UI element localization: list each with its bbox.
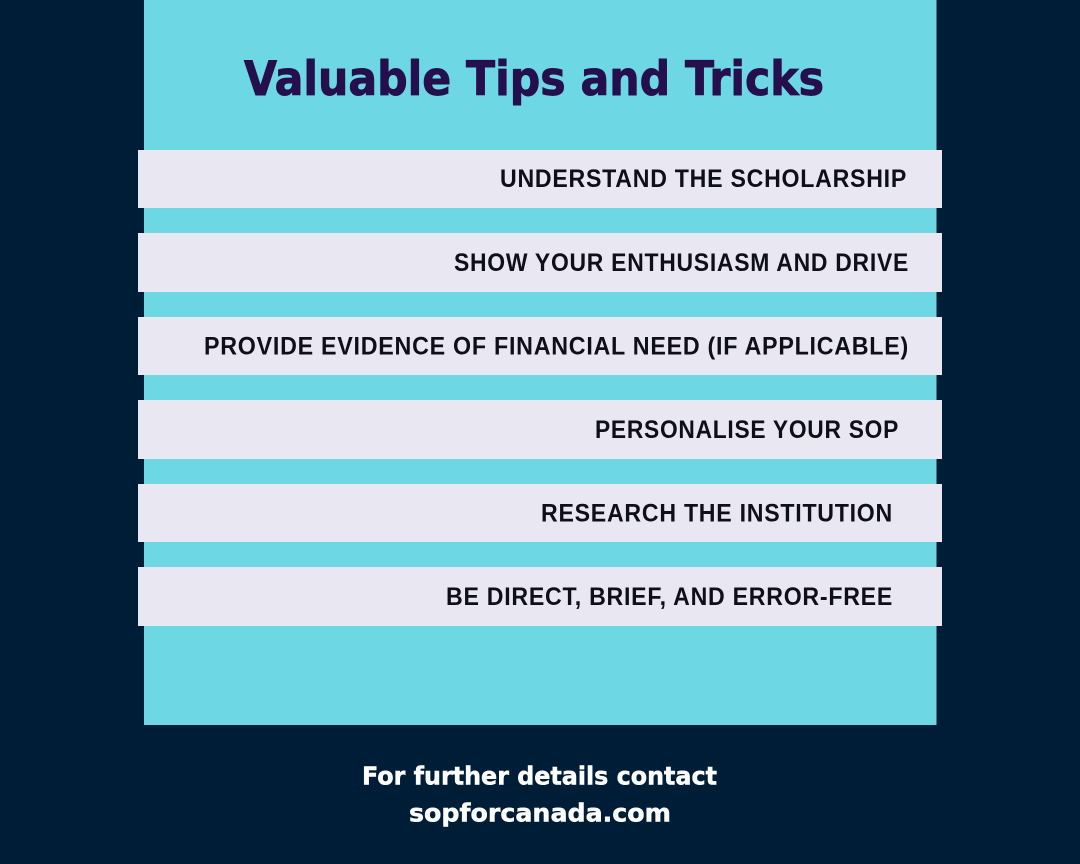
tip bar 2	[138, 233, 942, 292]
tip bar 6	[138, 567, 942, 626]
footer contact text: For further details contact	[362, 762, 717, 790]
footer contact text	[362, 762, 717, 828]
footer contact text: sopforcanada.com	[409, 798, 671, 828]
tip bar 2: SHOW YOUR ENTHUSIASM AND DRIVE	[454, 249, 909, 277]
tip bar 1	[138, 150, 942, 208]
tip bar 4	[138, 400, 942, 459]
title: Valuable Tips and Tricks	[244, 52, 824, 107]
panel: turquoise background	[144, 0, 936, 725]
tip bar 3: PROVIDE EVIDENCE OF FINANCIAL NEED (IF APPLICABLE)	[204, 332, 909, 360]
tip bar 5: RESEARCH THE INSTITUTION	[541, 500, 893, 528]
tip bar 5	[138, 484, 942, 542]
tip bar 1: UNDERSTAND THE SCHOLARSHIP	[500, 165, 907, 193]
tip bar 6: BE DIRECT, BRIEF, AND ERROR-FREE	[446, 583, 893, 611]
tip bar 3	[138, 317, 942, 375]
tip bar 4: PERSONALISE YOUR SOP	[595, 416, 899, 444]
